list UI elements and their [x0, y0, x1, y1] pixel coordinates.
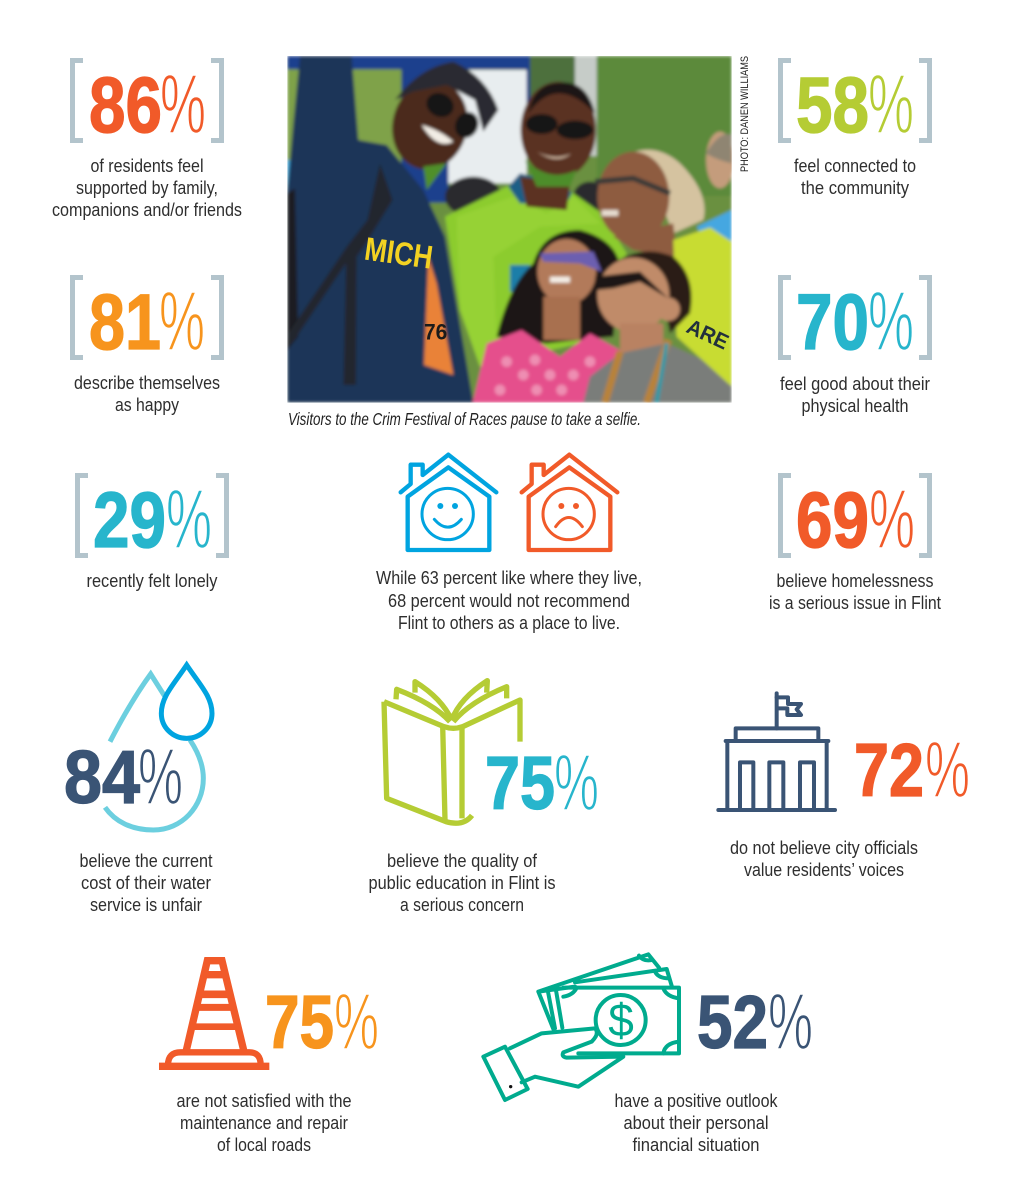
caption: physical health: physical health: [802, 395, 908, 416]
caption: feel connected: the community: [801, 177, 910, 198]
caption: homelessness: is a serious issue in Flint: [769, 592, 941, 613]
stat: 75 percent public education: %: [554, 738, 599, 827]
caption: financial outlook: have a positive outlook: [614, 1090, 778, 1111]
photo lettering: MICH: [362, 230, 435, 276]
stat: 84 percent water cost: %: [138, 732, 183, 821]
stat: 58 percent connected: 58: [796, 60, 869, 149]
caption: describe themselves as happy: describe themselves: [74, 372, 220, 393]
caption: describe themselves as happy: [74, 372, 220, 415]
boy hoodie: [583, 343, 732, 403]
stat: 72 percent city officials: 72: [854, 728, 924, 812]
man 1 body: [287, 56, 473, 403]
stat: 84 percent water cost: [64, 665, 212, 915]
photo credit: PHOTO: DANEN WILLIAMS: [739, 56, 751, 172]
caption: financial outlook: about their personal: [624, 1112, 768, 1133]
stat: 29 percent lonely: [78, 472, 226, 591]
stat: 75 percent public education: 75: [485, 741, 555, 825]
caption: water cost: cost of their water: [81, 872, 211, 893]
caption: financial outlook: [614, 1090, 778, 1155]
text: where they live: [376, 567, 642, 633]
boy: [613, 251, 691, 333]
text: where they live: While 63 percent like where they live,: [376, 567, 642, 588]
caption: describe themselves as happy: as happy: [115, 394, 180, 415]
stat: 29 percent lonely: 29: [93, 475, 166, 564]
race bib: [424, 257, 453, 375]
stat: 75 percent local roads: [159, 961, 379, 1155]
stat: 70 percent physical health: [780, 274, 930, 416]
caption: public education: believe the quality of: [387, 850, 538, 871]
stat: 81 percent happy: [72, 274, 222, 415]
caption: local roads: [176, 1090, 352, 1155]
photo lettering: 76: [424, 319, 447, 344]
stat: 52 percent financial outlook: [483, 954, 813, 1155]
stat: 52 percent financial outlook: %: [768, 977, 813, 1066]
woman jacket: [673, 227, 732, 387]
caption: water cost: [80, 850, 212, 915]
stat: 69 percent homelessness: [769, 472, 941, 613]
caption: financial outlook: financial situation: [632, 1134, 760, 1155]
caption: feel connected: [794, 155, 916, 198]
stat: 86 percent feel supported: [52, 57, 242, 220]
stat: 29 percent lonely: %: [166, 472, 212, 566]
caption: supported by family: companions and/or friends: [52, 199, 242, 220]
girl top: [473, 330, 620, 403]
photo: selfie at the Crim Festival: [287, 56, 734, 403]
stat: 86 percent feel supported: %: [160, 57, 206, 151]
caption: local roads: of local roads: [217, 1134, 311, 1155]
caption: homelessness: believe homelessness: [776, 570, 934, 591]
icon: happy house: [401, 455, 496, 550]
caption: city officials: [730, 837, 918, 880]
icon: open book: [384, 681, 520, 823]
caption: public education: a serious concern: [400, 894, 524, 915]
caption: water cost: believe the current: [80, 850, 212, 871]
icon: water drops: [105, 665, 212, 830]
caption: local roads: maintenance and repair: [180, 1112, 348, 1133]
photo lettering: [365, 237, 730, 350]
stat: 69 percent homelessness: %: [869, 472, 915, 566]
caption: public education: [368, 850, 556, 915]
woman face: [597, 152, 669, 242]
caption: physical health: feel good about their: [780, 373, 930, 394]
caption: local roads: are not satisfied with the: [176, 1090, 352, 1111]
girl hair: [497, 230, 620, 343]
stat: 81 percent happy: %: [159, 274, 205, 368]
houses icons and text: [376, 455, 642, 633]
stat: 58 percent connected: [780, 57, 930, 198]
caption: water cost: service is unfair: [90, 894, 202, 915]
stat: 69 percent homelessness: 69: [796, 475, 869, 564]
icon: dollar sign: $: [608, 994, 634, 1046]
stat: 72 percent city officials: %: [925, 725, 970, 814]
man 1 head: [390, 82, 469, 171]
photo caption: Visitors to the Crim Festival of Races pause to take a selfie.: [288, 409, 641, 429]
stat: 58 percent connected: %: [868, 57, 914, 151]
caption: public education: public education in Flint is: [368, 872, 556, 893]
photo lettering: ARE: [683, 314, 732, 355]
icon: sad house: [522, 455, 617, 550]
caption: supported by family: of residents feel: [90, 155, 204, 176]
stat: 70 percent physical health: 70: [796, 277, 869, 366]
icon: government building: [718, 693, 835, 810]
caption: city officials: do not believe city officials: [730, 837, 918, 858]
caption: recently felt lonely: recently felt lonely: [86, 570, 218, 591]
stat: 84 percent water cost: 84: [64, 735, 140, 819]
stat: 86 percent feel supported: 86: [89, 60, 162, 149]
text: where they live: 68 percent would not recommend: [388, 590, 630, 611]
stat: 75 percent public education: [368, 681, 599, 915]
stat: 72 percent city officials: [718, 693, 970, 880]
stat: 52 percent financial outlook: 52: [697, 980, 768, 1064]
caption: supported by family: [52, 155, 242, 220]
icon: traffic cone: [159, 961, 269, 1066]
shirt: [445, 185, 627, 367]
caption: city officials: value residents’ voices: [744, 859, 904, 880]
man 2: [521, 82, 596, 178]
text: where they live: Flint to others as a place to live.: [398, 612, 620, 633]
stat: 70 percent physical health: %: [868, 274, 914, 368]
caption: homelessness: [769, 570, 941, 613]
icon: hand holding money: [483, 954, 679, 1100]
stat: 81 percent happy: 81: [89, 277, 161, 366]
woman hair: [623, 150, 705, 233]
stat: 75 percent local roads: 75: [265, 980, 334, 1064]
stat: 75 percent local roads: %: [334, 977, 379, 1066]
caption: supported by family: supported by family,: [76, 177, 218, 198]
caption: feel connected: feel connected to: [794, 155, 916, 176]
caption: physical health: [780, 373, 930, 416]
girl face: [537, 239, 596, 304]
